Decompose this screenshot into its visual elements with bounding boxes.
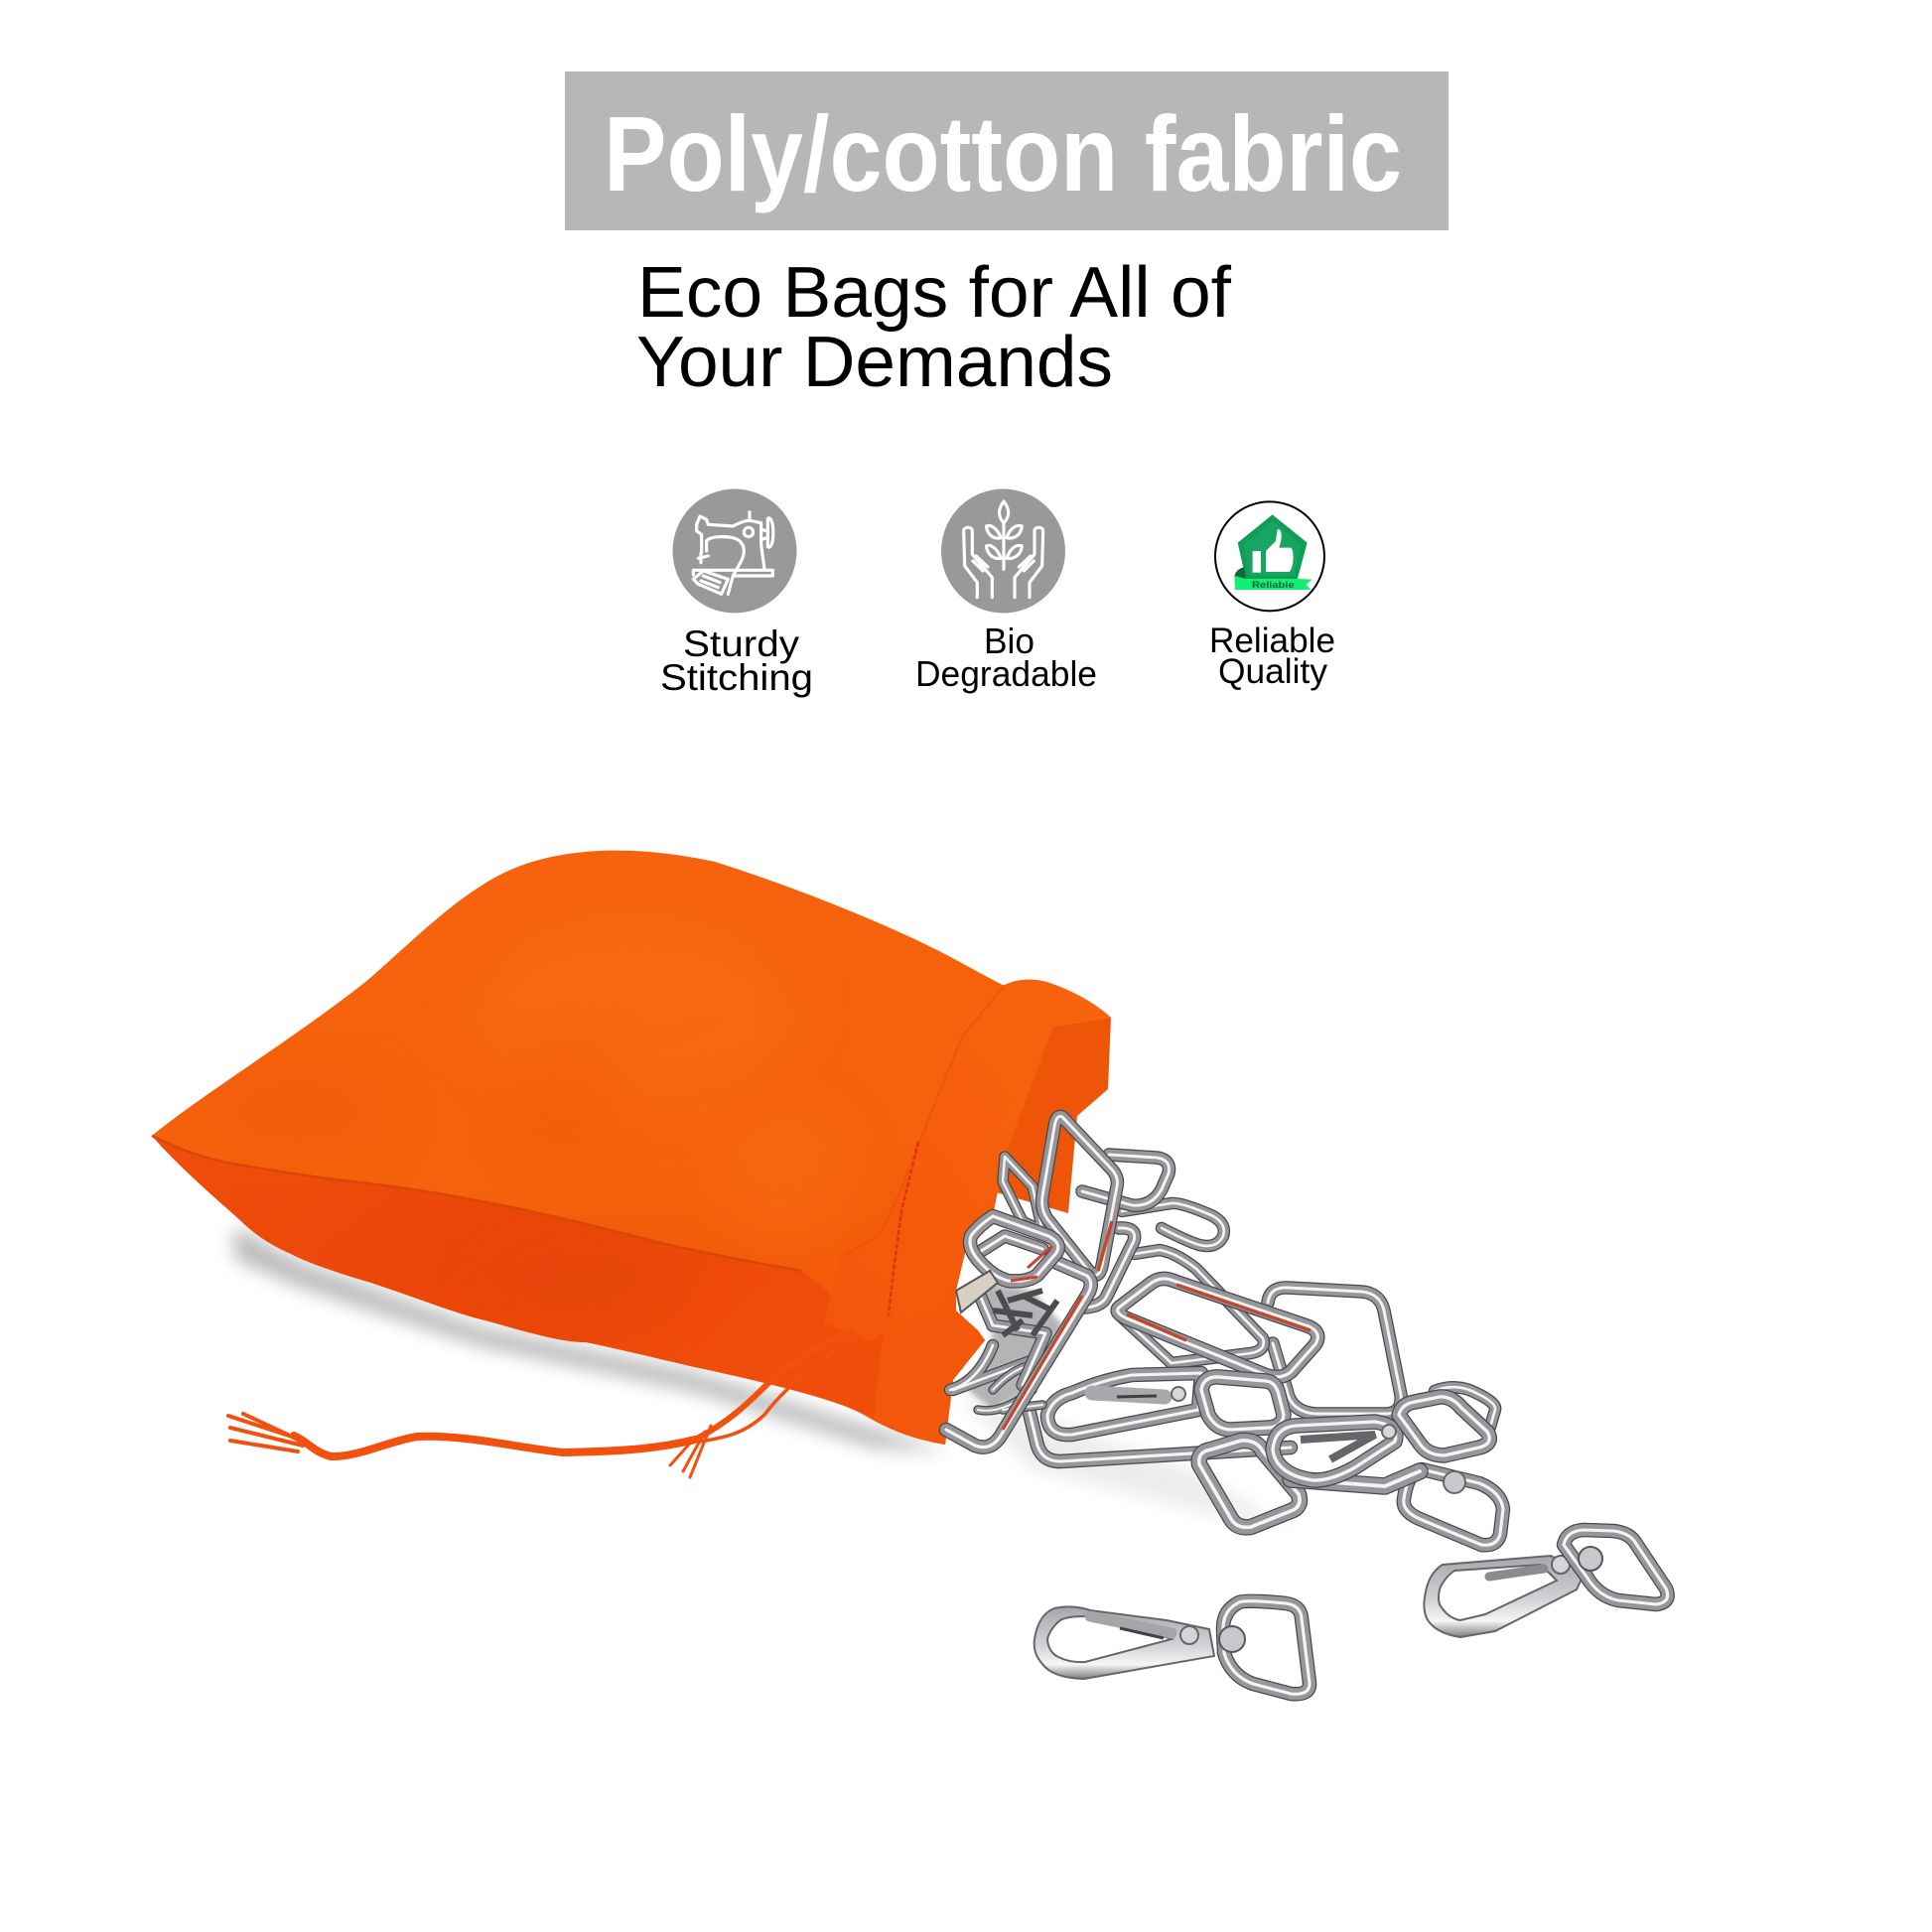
label: reliable quality: Quality <box>1218 652 1327 691</box>
metal clasp pile <box>946 1116 1503 1545</box>
subheading: Your Demands <box>636 323 1113 402</box>
label: reliable quality: Reliable <box>1209 621 1335 660</box>
icon: reliable badge: Reliable <box>1252 580 1295 590</box>
label: reliable quality <box>1209 621 1335 691</box>
product photo: orange bag with metal clasps <box>152 851 1668 1694</box>
feature: sturdy stitching <box>660 488 813 698</box>
label: sturdy stitching: Sturdy <box>683 623 800 664</box>
bag lower panel below seam <box>152 1136 884 1418</box>
label: bio degradable <box>915 621 1097 694</box>
bag drawstring hem <box>824 980 1111 1341</box>
icon: sewing machine <box>673 488 796 614</box>
icon: reliable badge <box>1215 501 1324 611</box>
icon: hands and wheat <box>941 488 1065 614</box>
label: bio degradable: Degradable <box>915 653 1097 694</box>
bag bottom seam <box>152 1136 802 1271</box>
label: bio degradable: Bio <box>984 621 1035 661</box>
bag collar lower flap <box>874 1311 985 1445</box>
clasp: bottom centre <box>1035 1601 1310 1694</box>
label: sturdy stitching: Stitching <box>660 657 813 698</box>
feature: bio degradable <box>915 488 1097 694</box>
label: sturdy stitching <box>660 623 813 698</box>
title banner <box>565 71 1449 230</box>
clasp: bottom right <box>1424 1530 1668 1637</box>
feature: reliable quality <box>1209 501 1335 691</box>
bag ground shadow <box>234 1226 1291 1529</box>
bag fabric shading <box>208 913 854 1320</box>
title text: Poly/cotton fabric <box>604 93 1402 213</box>
drawstring <box>228 1332 856 1477</box>
subheading <box>636 253 1232 402</box>
orange drawstring bag <box>152 851 1111 1445</box>
subheading: Eco Bags for All of <box>637 253 1232 333</box>
